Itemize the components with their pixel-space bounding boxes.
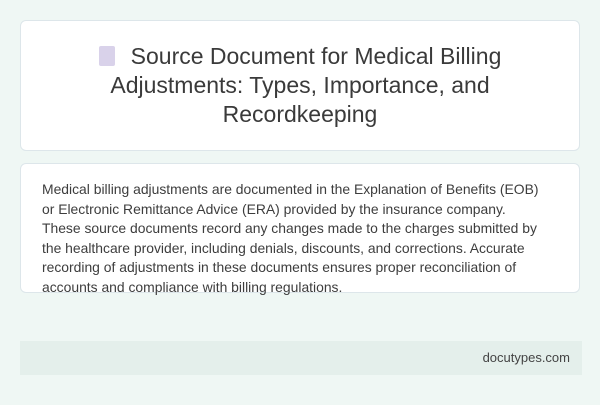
title card	[20, 20, 580, 151]
body text card: Medical billing adjustments are documented in the Explanation of Benefits (EOB) or Electronic Remittance Advice (ERA) provided by the insurance company. These source documents record any changes made to the charges submitted by the healthcare provider, including denials, discounts, and corrections. Accurate recording of adjustments in these documents ensures proper reconciliation of accounts and compliance with billing regulations.	[42, 181, 538, 294]
title: Source Document for Medical Billing Adjustments: Types, Importance, and Recordkeeping	[110, 43, 501, 127]
footer: docutypes.com	[483, 350, 570, 365]
footer	[20, 341, 582, 375]
